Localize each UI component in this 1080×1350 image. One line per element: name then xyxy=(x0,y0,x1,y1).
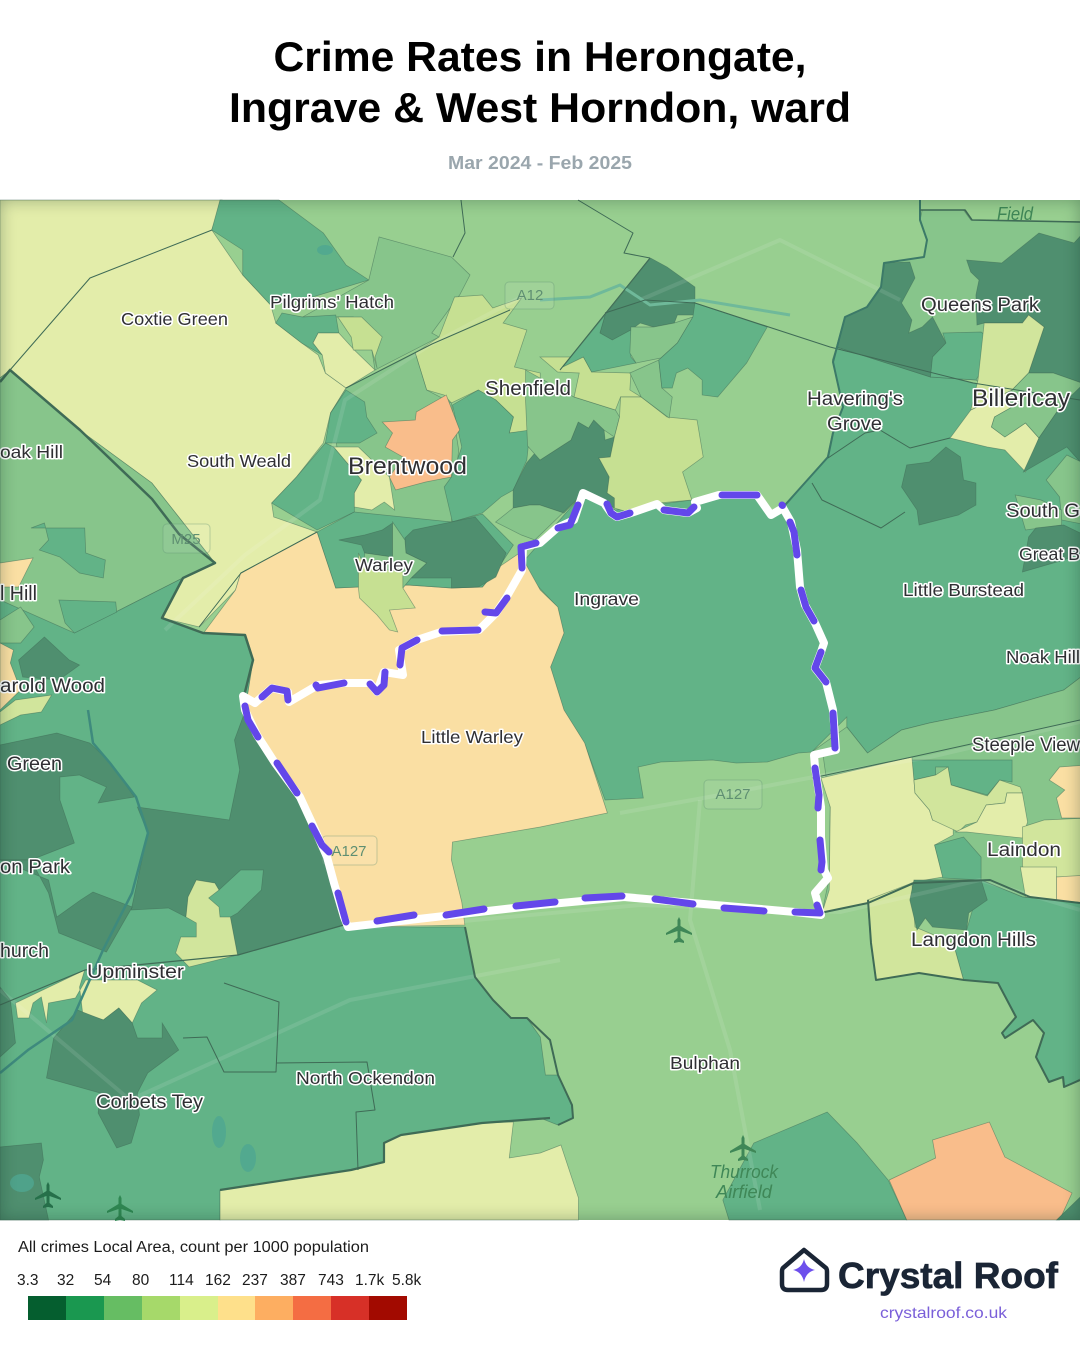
legend values: 237 xyxy=(242,1272,268,1289)
area: dark forest west xyxy=(131,712,344,955)
area: Brentwood centre xyxy=(382,395,460,490)
airfield labels: Airfield xyxy=(715,1182,773,1202)
title xyxy=(229,33,851,131)
legend values: 54 xyxy=(94,1272,112,1289)
place labels: Bulphan xyxy=(670,1053,740,1073)
place labels: arold Wood xyxy=(0,676,105,697)
area: Ingrave and east xyxy=(520,347,1080,800)
title: Ingrave & West Horndon, ward xyxy=(229,84,851,131)
website: crystalroof.co.uk xyxy=(880,1305,1008,1322)
place labels: Coxtie Green xyxy=(121,309,228,329)
area: south light yellow xyxy=(220,1122,578,1220)
title: Crime Rates in Herongate, xyxy=(274,33,807,80)
airfield labels: Field xyxy=(997,204,1034,224)
road label: A127 east: A127 xyxy=(715,786,751,803)
date range subtitle: Mar 2024 - Feb 2025 xyxy=(448,153,632,173)
place labels: Green xyxy=(7,754,62,775)
area: Little Warley xyxy=(204,532,607,927)
area: Shenfield west xyxy=(415,295,540,433)
place labels: oak Hill xyxy=(0,442,63,462)
place labels xyxy=(0,292,1080,1113)
place labels: Little Burstead xyxy=(903,580,1024,600)
area: dark north of Shenfield xyxy=(600,258,695,340)
areas: west of the map xyxy=(0,200,607,1220)
map edge shadow xyxy=(0,200,1080,1220)
wordmark: Crystal Roof xyxy=(838,1255,1059,1296)
area: Noak Hill west xyxy=(0,370,215,680)
area: Langdon Hills xyxy=(953,880,1080,1087)
place labels: North Ockendon xyxy=(296,1068,435,1088)
areas: east of the map xyxy=(496,210,1080,1220)
place labels: Havering's xyxy=(807,389,903,410)
place labels: Corbets Tey xyxy=(96,1092,204,1113)
place labels: South Weald xyxy=(187,451,291,471)
place labels: Steeple View xyxy=(972,735,1080,756)
place labels: Upminster xyxy=(87,962,185,983)
rivers xyxy=(0,710,148,1073)
legend title: All crimes Local Area, count per 1000 population xyxy=(18,1239,369,1256)
water features xyxy=(10,245,790,1192)
place labels: Laindon xyxy=(987,840,1061,861)
roads xyxy=(0,240,1080,1210)
legend values: 387 xyxy=(280,1272,306,1289)
area: Queens Park xyxy=(836,210,1080,420)
logo: Crystal Roof xyxy=(782,1250,1059,1322)
place labels: Noak Hill xyxy=(1006,647,1080,667)
place labels: Brentwood xyxy=(348,453,467,480)
place labels: hurch xyxy=(0,941,49,962)
area: Harold Hill and Upminster base xyxy=(0,578,573,1220)
place labels: Billericay xyxy=(972,385,1070,412)
place labels: Pilgrims' Hatch xyxy=(270,292,394,312)
area: South Weald xyxy=(0,200,346,627)
legend values: 5.8k xyxy=(392,1272,422,1289)
area: Brentwood surrounds xyxy=(331,353,459,522)
place labels: Langdon Hills xyxy=(911,930,1036,951)
legend xyxy=(17,1239,422,1320)
road label: A127 east xyxy=(704,780,762,809)
area: Thurrock south xyxy=(723,1112,907,1220)
place labels: Queens Park xyxy=(921,295,1040,316)
airfield labels: Thurrock xyxy=(710,1162,779,1182)
road label: M25: M25 xyxy=(171,531,201,548)
choropleth map xyxy=(0,200,1080,1221)
place labels: Warley xyxy=(355,555,413,575)
place labels: South G xyxy=(1006,501,1080,522)
legend values: 80 xyxy=(132,1272,150,1289)
icon: house with star xyxy=(782,1250,827,1290)
road label: A127 west xyxy=(322,836,377,865)
area: Shenfield east xyxy=(540,357,641,410)
legend values: 3.3 xyxy=(17,1272,39,1289)
legend values: 114 xyxy=(169,1272,194,1289)
area: Billericay xyxy=(950,315,1044,472)
area: dark patch east of Brentwood xyxy=(513,420,614,513)
road label: A127 west: A127 xyxy=(331,843,367,860)
place labels: l Hill xyxy=(0,583,37,605)
place labels: Little Warley xyxy=(421,727,523,747)
area: dark patch Little Burstead xyxy=(902,447,976,525)
place labels: on Park xyxy=(0,857,71,878)
area: Warley xyxy=(317,512,513,588)
area: Pilgrims' Hatch xyxy=(303,237,470,370)
legend values: 162 xyxy=(205,1272,231,1289)
road label: M25 xyxy=(163,524,210,553)
legend values: 743 xyxy=(318,1272,344,1289)
district boundary lines xyxy=(0,200,1080,1190)
place labels: Grove xyxy=(827,414,882,435)
area: Steeple View and Laindon xyxy=(812,672,1080,913)
legend values xyxy=(17,1272,422,1289)
legend colour scale xyxy=(28,1296,407,1320)
place labels: Great B xyxy=(1019,544,1080,564)
icon: airfield planes xyxy=(35,917,756,1221)
place labels: Ingrave xyxy=(574,589,639,609)
place labels: Shenfield xyxy=(485,378,571,400)
legend values: 1.7k xyxy=(355,1272,385,1289)
airfield labels xyxy=(710,204,1034,1202)
area: Upminster centre xyxy=(176,880,238,967)
road label: A12 xyxy=(505,282,554,309)
road label: A12: A12 xyxy=(517,287,543,304)
area: forest north of Pilgrims' Hatch xyxy=(212,200,369,305)
legend values: 32 xyxy=(57,1272,74,1289)
ward boundary xyxy=(243,493,836,927)
